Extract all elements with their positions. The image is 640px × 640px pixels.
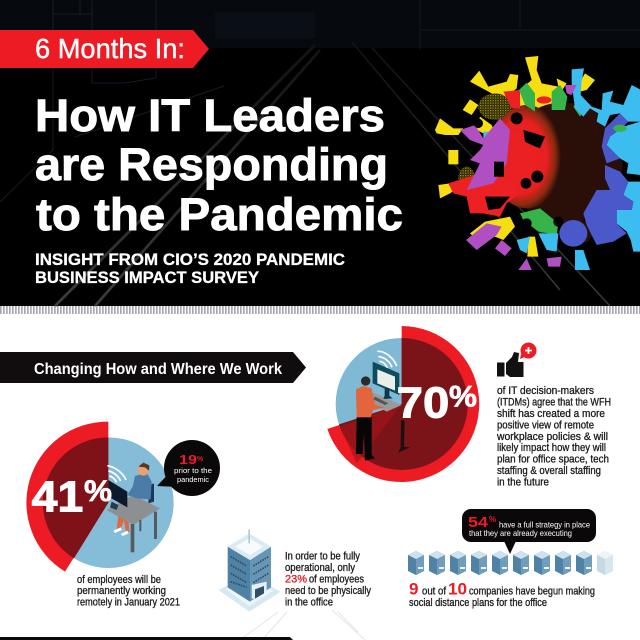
stat: 70%: 70 xyxy=(397,378,449,427)
banner: 6 Months In xyxy=(0,30,209,68)
callout: 19% prior to the pandemic: 19 xyxy=(179,452,197,467)
text: 70% description: shift has created a more xyxy=(497,408,605,420)
text: 9 out of 10 companies: companies have begun making xyxy=(469,586,595,598)
text: building description: need to be physically xyxy=(285,585,371,597)
text: 70% description xyxy=(496,385,611,488)
footer: next section edge xyxy=(0,610,365,640)
text: building description: of employees xyxy=(309,574,364,586)
subtitle xyxy=(35,250,345,287)
title: are Responding xyxy=(35,139,388,190)
callout: 54% strategy: % xyxy=(489,515,496,524)
text: 70% description: workplace policies & will xyxy=(496,431,608,443)
illustration: person at desk xyxy=(107,463,160,552)
chart ring and background xyxy=(26,422,174,572)
text: 9 out of 10 companies xyxy=(409,580,595,609)
text: 9 out of 10 companies: 9 xyxy=(409,580,418,598)
banner: 6 Months In: 6 Months In: xyxy=(35,33,185,64)
text: 9 out of 10 companies: 10 xyxy=(448,580,467,598)
subtitle: BUSINESS IMPACT SURVEY xyxy=(35,268,260,287)
callout: 19% prior to the pandemic: pandemic xyxy=(177,475,209,484)
icon: coronavirus illustration xyxy=(435,56,640,270)
text: 70% description: (ITDMs) agree that the WFH xyxy=(497,396,611,408)
callout: 54% strategy xyxy=(462,509,596,554)
virus spikes cyan xyxy=(483,68,640,270)
callout: 19% prior to the pandemic: % xyxy=(197,456,204,463)
callout: 54% strategy: 54 xyxy=(468,514,489,531)
text: 9 out of 10 companies: social distance plans for the office xyxy=(409,597,547,609)
text: 9 out of 10 companies: out of xyxy=(422,586,447,598)
illustration: person at standing desk xyxy=(356,362,410,461)
panel: 70% chart xyxy=(327,326,479,482)
header background xyxy=(0,0,640,306)
text: building description: operational, only xyxy=(285,562,355,574)
stat: percent sign: % xyxy=(84,475,112,508)
stat: percent sign: % xyxy=(449,381,477,414)
text: building description: In order to be fully xyxy=(285,550,360,562)
text: building description: 23% xyxy=(285,574,307,586)
text: 41% description: remotely in January 2021 xyxy=(77,596,180,608)
text: 70% description: of IT decision-makers xyxy=(497,385,594,397)
section heading xyxy=(0,352,306,383)
icon: wifi xyxy=(377,351,397,368)
virus spikes purple xyxy=(460,85,577,270)
panel: 41% chart xyxy=(26,422,174,572)
callout: 19% prior to the pandemic: prior to the xyxy=(174,466,212,475)
virus spikes yellow xyxy=(435,56,595,257)
virus spikes blue xyxy=(483,113,633,247)
section heading: Changing How and Where We Work xyxy=(34,361,282,378)
text: 70% description: plan for office space, tech xyxy=(497,454,609,466)
virus body xyxy=(504,102,623,221)
subtitle: INSIGHT FROM CIO’S 2020 PANDEMIC xyxy=(35,250,345,269)
chart ring and background xyxy=(327,326,479,482)
virus dark holes xyxy=(474,112,563,228)
text: 70% description: positive view of remote xyxy=(497,420,594,432)
text: 41% description: permanently working xyxy=(77,585,166,597)
text: building description xyxy=(285,550,371,608)
text: 70% description: staffing & overall staffing xyxy=(497,465,601,477)
callout: 54% strategy: have a full strategy in place xyxy=(499,520,590,530)
callout: 19% prior to the pandemic xyxy=(157,440,220,496)
icon: office building xyxy=(218,529,281,612)
text: 70% description: in the future xyxy=(497,476,549,488)
stat: 41%: 41 xyxy=(32,473,83,522)
text: 41% description: of employees will be xyxy=(77,574,161,586)
text: building description: in the office xyxy=(285,596,333,608)
text: 70% description: likely impact how they will xyxy=(497,442,606,454)
callout: 54% strategy: that they are already executing xyxy=(469,528,572,538)
text: 41% description xyxy=(77,574,180,608)
title: to the Pandemic xyxy=(36,189,403,240)
icon: thumbs up xyxy=(497,342,536,377)
icon: wifi xyxy=(107,466,126,482)
title: How IT Leaders xyxy=(35,90,385,141)
title xyxy=(35,90,403,240)
icon row: ten buildings xyxy=(408,551,613,575)
virus speckled yellow areas xyxy=(458,93,512,190)
divider band xyxy=(0,306,640,314)
virus green patches xyxy=(519,83,586,235)
